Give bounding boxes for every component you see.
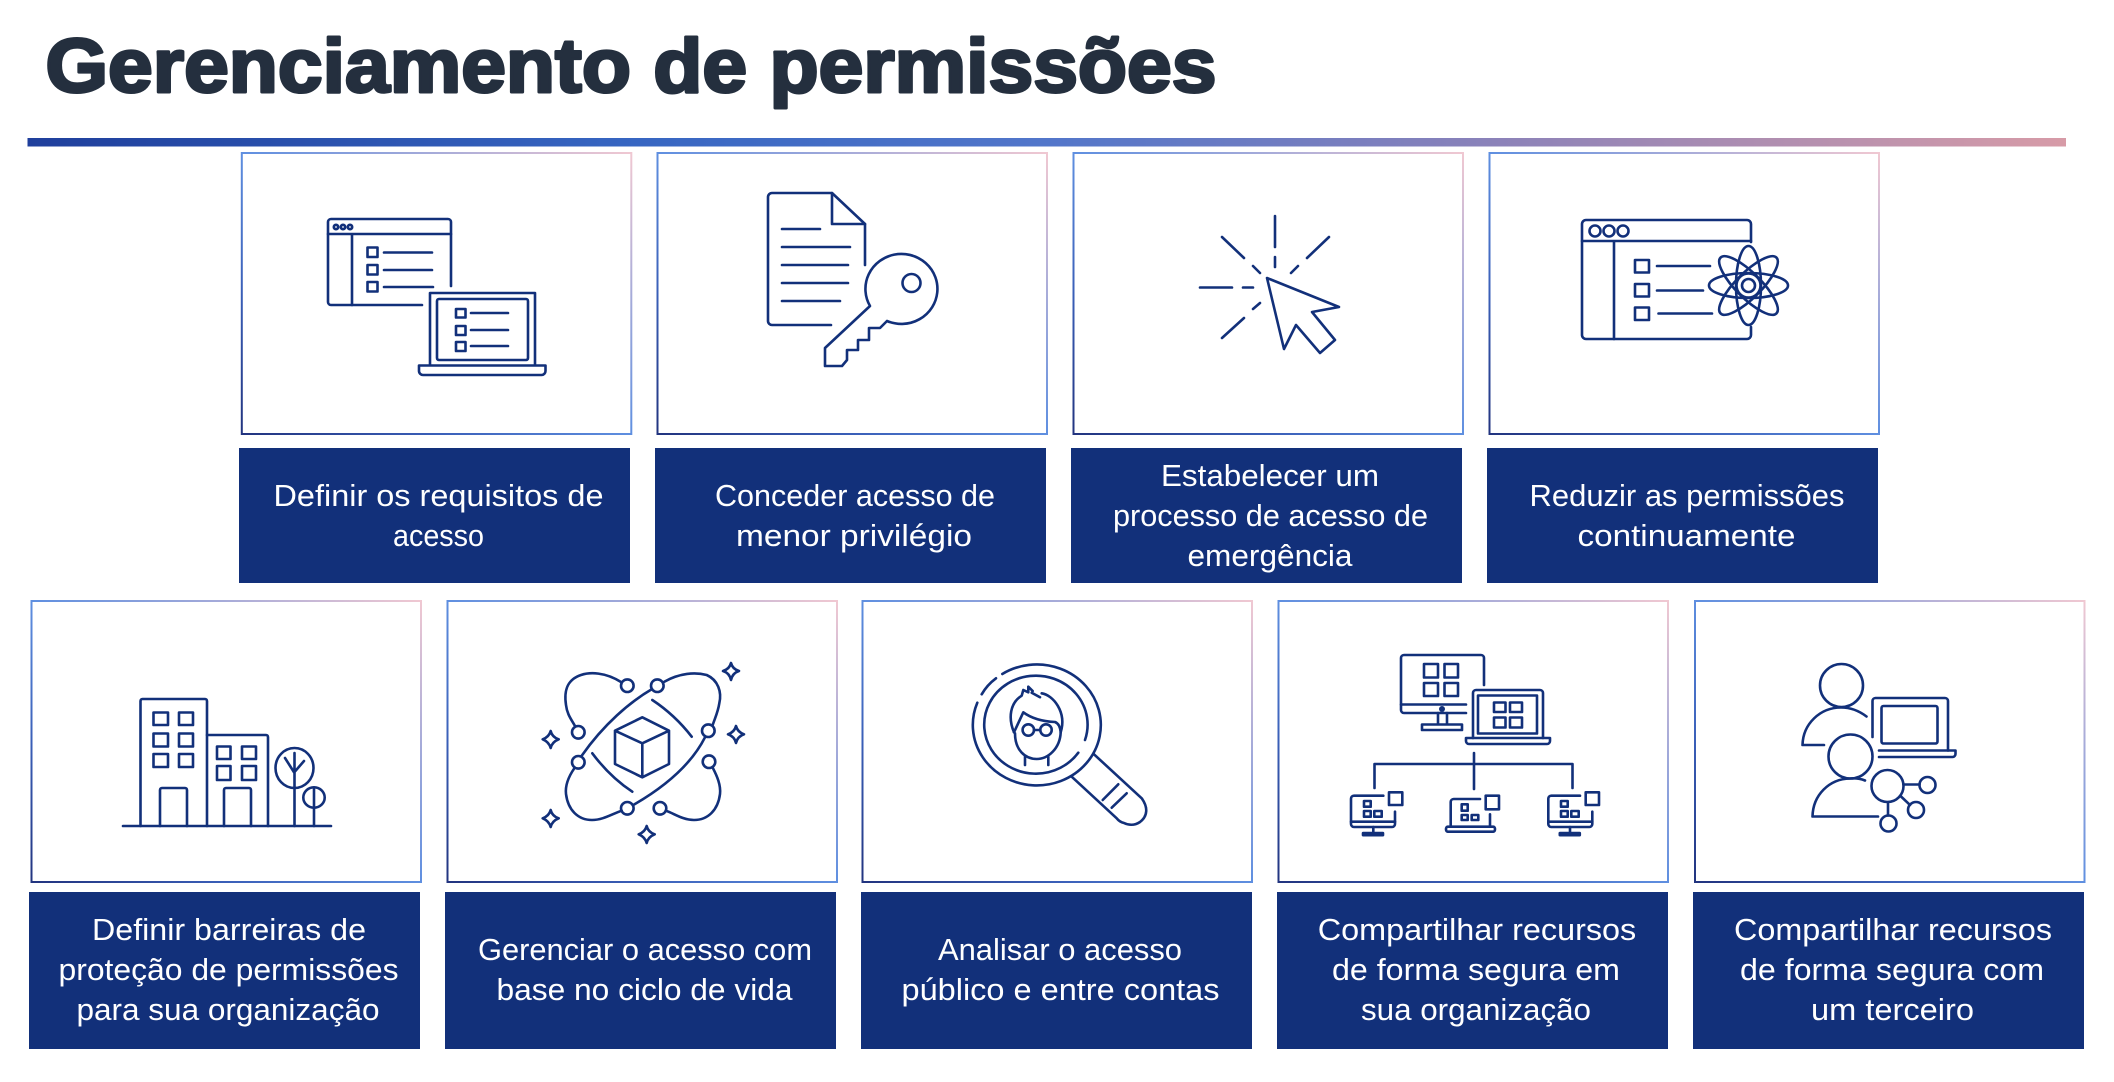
label bar	[445, 892, 836, 1049]
panel: gerenciar o acesso com base no ciclo de vida	[445, 601, 837, 1049]
panel: definir barreiras de protecao	[29, 601, 421, 1049]
icon: cursor click with rays	[1200, 216, 1339, 353]
label bar: emergência	[1188, 538, 1353, 573]
label bar: base no ciclo de vida	[496, 972, 793, 1007]
card frame	[658, 153, 1047, 434]
panel: analisar o acesso publico e entre contas	[861, 601, 1252, 1049]
icon: computers network tree	[1351, 655, 1599, 836]
label bar	[1071, 448, 1462, 583]
label bar: Conceder acesso de	[715, 478, 995, 513]
label bar: Gerenciar o acesso com	[478, 932, 812, 967]
label bar: Compartilhar recursos	[1318, 912, 1636, 947]
icon: document and key	[768, 193, 937, 366]
card frame	[1074, 153, 1463, 434]
card frame	[1490, 153, 1879, 434]
label bar: público e entre contas	[902, 972, 1220, 1007]
label bar: Definir barreiras de	[92, 912, 366, 947]
label bar	[1487, 448, 1878, 583]
panel: definir os requisitos de acesso	[239, 153, 631, 583]
label bar: Compartilhar recursos	[1734, 912, 2052, 947]
label bar	[1693, 892, 2084, 1049]
label bar: um terceiro	[1811, 992, 1974, 1027]
label bar	[655, 448, 1046, 583]
panel: estabelecer um processo de acesso de emergencia	[1071, 153, 1463, 583]
label bar: para sua organização	[76, 992, 380, 1027]
title: Gerenciamento de permissões	[46, 24, 1216, 109]
icon: window with atom	[1582, 220, 1788, 339]
card frame	[1695, 601, 2084, 882]
card frame	[32, 601, 421, 882]
panel: compartilhar recursos em sua organizacao	[1277, 601, 1668, 1049]
label bar: continuamente	[1578, 518, 1796, 553]
label bar: Analisar o acesso	[938, 932, 1182, 967]
label bar	[239, 448, 630, 583]
icon: cube with orbits and sparkles	[543, 663, 744, 843]
label bar: Definir os requisitos de	[274, 478, 604, 513]
icon: buildings and trees	[123, 699, 331, 826]
label bar: de forma segura em	[1332, 952, 1620, 987]
card frame	[1278, 601, 1668, 882]
label bar: Estabelecer um	[1161, 458, 1379, 493]
card frame	[448, 601, 837, 882]
icon: magnifier with person	[973, 664, 1146, 825]
label bar	[861, 892, 1252, 1049]
panel: compartilhar recursos com um terceiro	[1693, 601, 2084, 1049]
card frame	[862, 601, 1252, 882]
label bar: de forma segura com	[1740, 952, 2044, 987]
icon: window and laptop with checklists	[328, 219, 546, 375]
label bar: sua organização	[1361, 992, 1591, 1027]
label bar: acesso	[393, 518, 484, 553]
label bar: Reduzir as permissões	[1530, 478, 1844, 513]
label bar	[1277, 892, 1668, 1049]
icon: two people with laptop and network	[1802, 664, 1956, 832]
label bar: menor privilégio	[736, 518, 972, 553]
panel: conceder acesso de menor privilegio	[655, 153, 1047, 583]
card frame	[242, 153, 631, 434]
label bar	[29, 892, 420, 1049]
gradient rule under title	[28, 138, 2066, 146]
label bar: proteção de permissões	[58, 952, 399, 987]
panel: reduzir as permissoes continuamente	[1487, 153, 1879, 583]
label bar: processo de acesso de	[1113, 498, 1428, 533]
